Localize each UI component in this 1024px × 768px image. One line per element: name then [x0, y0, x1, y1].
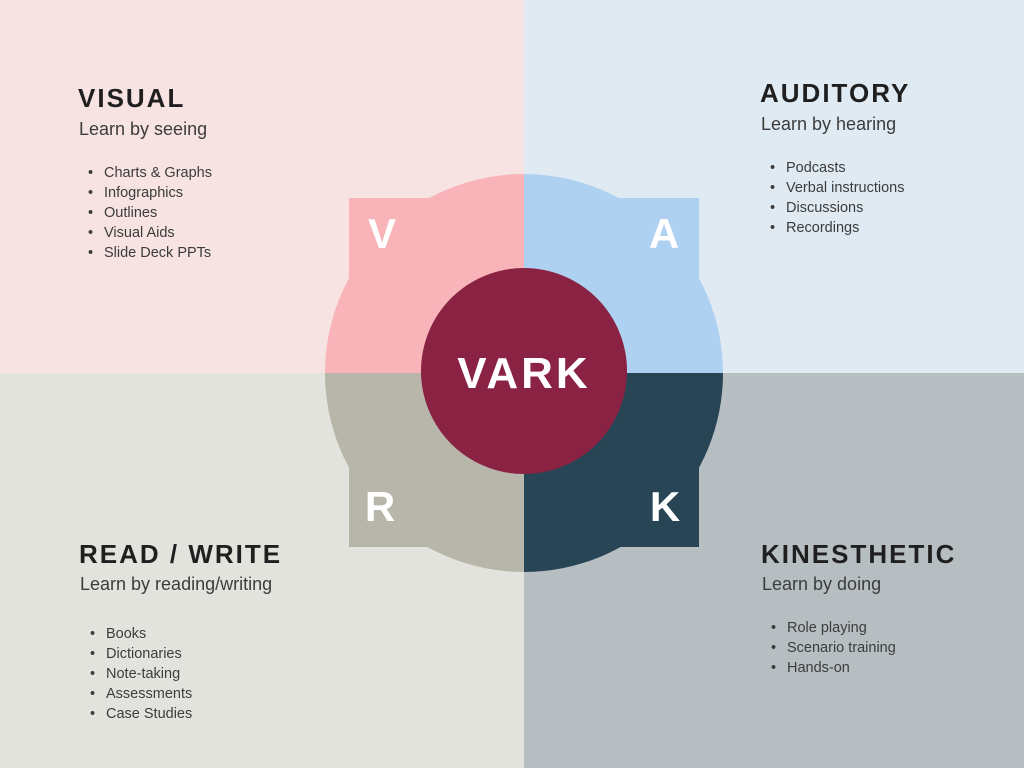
- letter R: R: [365, 483, 395, 530]
- panel: read/write: Learn by reading/writing: [80, 574, 272, 594]
- panel: visual: •: [88, 165, 93, 181]
- panel: read/write: Case Studies: [106, 706, 192, 722]
- panel: kinesthetic: Scenario training: [787, 640, 896, 656]
- panel: read/write: •: [90, 706, 95, 722]
- panel: read/write: •: [90, 686, 95, 702]
- panel: visual: •: [88, 185, 93, 201]
- panel: visual: •: [88, 245, 93, 261]
- center label: VARK: [457, 349, 591, 398]
- panel: visual: Charts & Graphs: [104, 165, 212, 181]
- panel: visual: Learn by seeing: [79, 119, 207, 139]
- segment: V: [325, 174, 524, 373]
- panel: kinesthetic: Learn by doing: [762, 574, 881, 594]
- panel: kinesthetic: [761, 539, 956, 676]
- panel: auditory: Recordings: [786, 220, 859, 236]
- panel: auditory: •: [770, 180, 775, 196]
- panel: auditory: Podcasts: [786, 160, 846, 176]
- panel: auditory: •: [770, 220, 775, 236]
- panel: kinesthetic: •: [771, 660, 776, 676]
- panel: auditory: AUDITORY: [760, 78, 910, 108]
- panel: kinesthetic: •: [771, 620, 776, 636]
- panel: visual: •: [88, 205, 93, 221]
- panel: read/write: Dictionaries: [106, 646, 182, 662]
- panel: auditory: •: [770, 200, 775, 216]
- panel: auditory: Discussions: [786, 200, 863, 216]
- panel: auditory: •: [770, 160, 775, 176]
- panel: visual: Slide Deck PPTs: [104, 245, 211, 261]
- panel: visual: [78, 83, 212, 261]
- panel: read/write: READ / WRITE: [79, 539, 282, 569]
- segment: A: [524, 174, 723, 373]
- letter K: K: [650, 483, 680, 530]
- letter V: V: [368, 210, 396, 257]
- panel: read/write: •: [90, 626, 95, 642]
- panel: read/write: [79, 539, 282, 722]
- panel: visual: Visual Aids: [104, 225, 175, 241]
- panel: kinesthetic: Role playing: [787, 620, 867, 636]
- panel: kinesthetic: KINESTHETIC: [761, 539, 956, 569]
- panel: visual: VISUAL: [78, 83, 185, 113]
- panel: read/write: Note-taking: [106, 666, 180, 682]
- segment: R: [325, 373, 524, 572]
- panel: auditory: Verbal instructions: [786, 180, 904, 196]
- panel: visual: Infographics: [104, 185, 183, 201]
- panel: read/write: Books: [106, 626, 146, 642]
- VARK diagram: [325, 174, 723, 572]
- panel: kinesthetic: •: [771, 640, 776, 656]
- letter A: A: [649, 210, 679, 257]
- panel: visual: Outlines: [104, 205, 157, 221]
- segment: K: [524, 373, 723, 572]
- panel: read/write: •: [90, 646, 95, 662]
- panel: auditory: [760, 78, 910, 236]
- panel: read/write: Assessments: [106, 686, 192, 702]
- panel: kinesthetic: Hands-on: [787, 660, 850, 676]
- panel: auditory: Learn by hearing: [761, 114, 896, 134]
- center circle: [421, 268, 627, 474]
- panel: read/write: •: [90, 666, 95, 682]
- panel: visual: •: [88, 225, 93, 241]
